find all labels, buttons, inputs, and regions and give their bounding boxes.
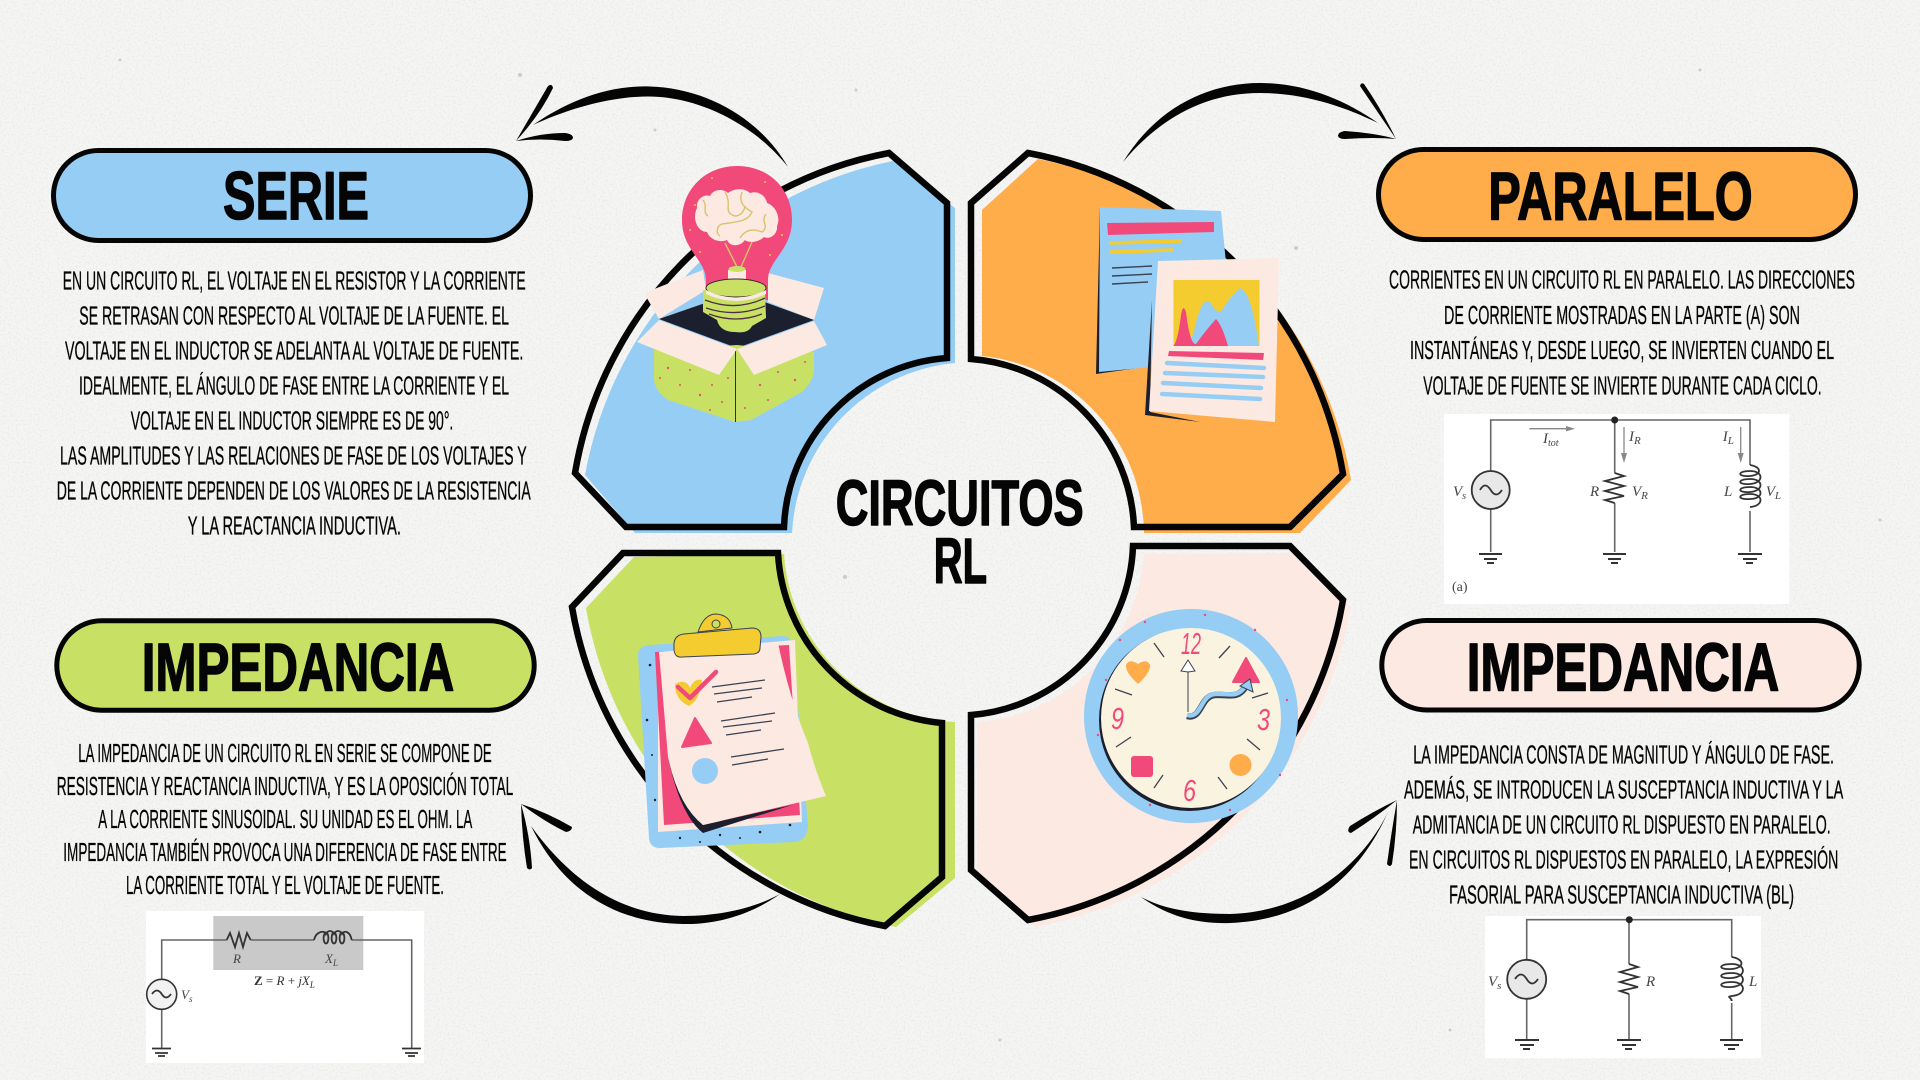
- text block: Serie: IDEALMENTE, EL ÁNGULO DE FASE ENTRE LA CORRIENTE Y EL: [79, 371, 509, 400]
- circuit diagram: series RL impedance: X: [325, 951, 333, 966]
- circuit diagram: parallel RL with currents: V: [1453, 484, 1462, 500]
- icon: documents with chart: [1096, 207, 1279, 422]
- center title: RL: [934, 525, 987, 597]
- icon: clock: 3: [1257, 702, 1270, 737]
- circuit diagram: parallel RL with currents: [1444, 414, 1789, 604]
- panel: blue quadrant: [575, 153, 955, 533]
- heading: Serie: [54, 150, 530, 240]
- circuit diagram: series RL impedance: Z = R + jX: [254, 973, 310, 988]
- circuit diagram: parallel RL with currents: R: [1640, 490, 1648, 502]
- circuit diagram: parallel RL with currents: L: [1727, 435, 1734, 447]
- circuit diagram: series RL impedance: L: [332, 958, 338, 968]
- heading: Impedancia (paralelo): [1382, 620, 1859, 710]
- text block: Serie: LAS AMPLITUDES Y LAS RELACIONES DE FASE DE LOS VOLTAJES Y: [60, 442, 527, 470]
- circuit diagram: series RL impedance: V: [181, 987, 189, 1002]
- heading: Serie: SERIE: [223, 158, 369, 234]
- text block: Serie: VOLTAJE EN EL INDUCTOR SIEMPRE ES DE 90°.: [131, 407, 453, 435]
- circuit diagram: parallel RL with currents: L: [1774, 490, 1781, 502]
- circuit diagram: series RL impedance: s: [189, 994, 193, 1004]
- text block: Serie: [57, 267, 531, 540]
- circuit diagram: parallel RL with currents: (a): [1452, 580, 1468, 595]
- circuit diagram: series RL impedance: L: [309, 980, 315, 990]
- circuit diagram: parallel RL with currents: I: [1629, 429, 1634, 445]
- heading: Impedancia (paralelo): IMPEDANCIA: [1467, 629, 1779, 705]
- circuit diagram: parallel RL with currents: R: [1633, 435, 1641, 447]
- circuit diagram: parallel RL with currents: L: [1723, 484, 1732, 500]
- circuit diagram: parallel RL with currents: I: [1723, 429, 1728, 445]
- text block: Impedancia serie: RESISTENCIA Y REACTANCIA INDUCTIVA, Y ES LA OPOSICIÓN TOTAL: [57, 772, 513, 801]
- arrow: bottom left, towards Impedancia serie: [521, 804, 780, 924]
- icon: clipboard checklist: [638, 614, 826, 848]
- panel: green quadrant: [572, 553, 955, 927]
- text block: Impedancia serie: IMPEDANCIA TAMBIÉN PROVOCA UNA DIFERENCIA DE FASE ENTRE: [63, 838, 507, 867]
- circuit diagram: parallel RL with currents: V: [1632, 484, 1641, 500]
- arrow: bottom right, towards Impedancia paralelo: [1141, 800, 1397, 923]
- icon: clock: [1084, 609, 1298, 823]
- heading: Paralelo: PARALELO: [1488, 158, 1753, 234]
- heading: Paralelo: [1378, 150, 1856, 240]
- circuit diagram: parallel RL: s: [1497, 980, 1501, 992]
- circuit diagram: parallel RL with currents: R: [1589, 484, 1599, 500]
- circuit diagram: series RL impedance: R: [232, 951, 241, 966]
- text block: Serie: VOLTAJE EN EL INDUCTOR SE ADELANTA AL VOLTAJE DE FUENTE.: [65, 337, 523, 365]
- circuit diagram: parallel RL: R: [1645, 974, 1655, 990]
- center title: [836, 467, 1084, 597]
- text block: Serie: SE RETRASAN CON RESPECTO AL VOLTAJE DE LA FUENTE. EL: [79, 302, 509, 330]
- icon: clock: 6: [1183, 773, 1197, 808]
- heading: Impedancia (serie): [57, 621, 534, 710]
- text block: Serie: EN UN CIRCUITO RL, EL VOLTAJE EN EL RESISTOR Y LA CORRIENTE: [63, 267, 526, 295]
- text block: Impedancia serie: LA CORRIENTE TOTAL Y EL VOLTAJE DE FUENTE.: [126, 872, 444, 900]
- panel: orange quadrant: [971, 153, 1351, 533]
- heading: Impedancia (serie): IMPEDANCIA: [142, 629, 454, 705]
- circuit diagram: parallel RL with currents: I: [1543, 431, 1548, 447]
- circuit diagram: parallel RL: [1485, 916, 1761, 1058]
- icon: clock: 12: [1181, 626, 1201, 661]
- circuit diagram: parallel RL: V: [1488, 974, 1497, 990]
- panel: peach quadrant: [971, 546, 1351, 927]
- center title: CIRCUITOS: [836, 467, 1084, 539]
- circuit diagram: parallel RL: L: [1748, 974, 1757, 990]
- text block: Impedancia serie: LA IMPEDANCIA DE UN CIRCUITO RL EN SERIE SE COMPONE DE: [78, 740, 492, 768]
- circuit diagram: parallel RL with currents: tot: [1548, 438, 1559, 449]
- circuit diagram: series RL impedance: [146, 911, 424, 1063]
- text block: Serie: Y LA REACTANCIA INDUCTIVA.: [188, 512, 401, 540]
- text block: Impedancia paralelo: [1404, 740, 1843, 910]
- circuit diagram: parallel RL with currents: s: [1462, 491, 1466, 502]
- text block: Impedancia serie: A LA CORRIENTE SINUSOIDAL. SU UNIDAD ES EL OHM. LA: [98, 806, 472, 834]
- icon: clock: 9: [1111, 701, 1124, 736]
- circuit diagram: parallel RL with currents: V: [1766, 484, 1775, 500]
- icon: light bulb with brain in a box: [637, 166, 827, 422]
- arrow: top left, towards Serie: [516, 85, 788, 167]
- text block: Impedancia serie: [57, 740, 513, 900]
- text block: Serie: DE LA CORRIENTE DEPENDEN DE LOS VALORES DE LA RESISTENCIA: [57, 477, 531, 505]
- text block: Paralelo: [1389, 267, 1855, 400]
- arrow: top right, towards Paralelo: [1123, 83, 1396, 162]
